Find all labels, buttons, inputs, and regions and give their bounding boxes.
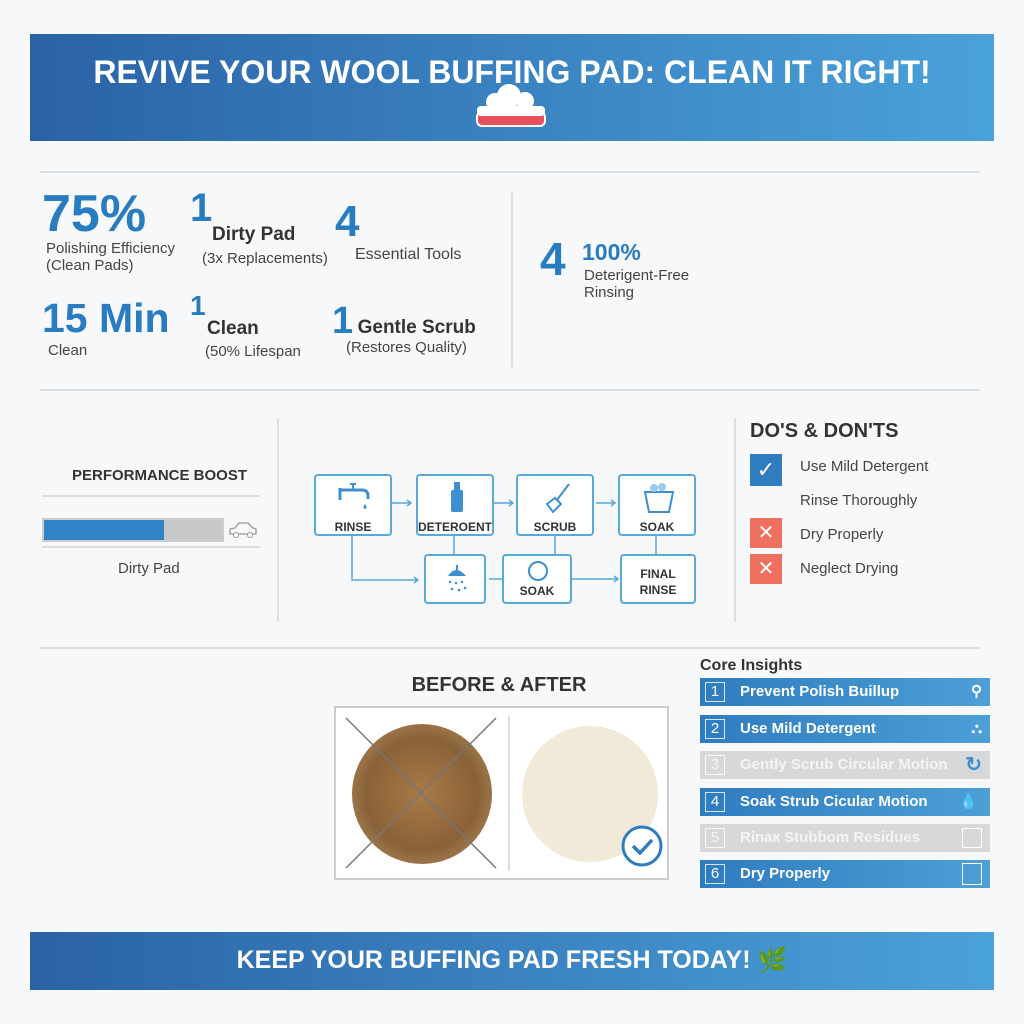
panel: performance boost: Dirty Pad — [118, 560, 180, 577]
insight 6 — [700, 860, 990, 888]
insight 2: Use Mild Detergent — [740, 720, 876, 737]
clean pad — [522, 726, 662, 866]
insight 3: Gently Scrub Circular Motion — [740, 756, 948, 773]
step scrub: SCRUB — [534, 520, 576, 534]
stat 100%: 100% — [582, 239, 641, 265]
stat 75%: 75% — [42, 185, 146, 243]
insight 3 — [700, 751, 990, 779]
panel: dos and donts: ✕ — [758, 558, 774, 580]
title: REVIVE YOUR WOOL BUFFING PAD: CLEAN IT RIGHT! — [93, 54, 931, 90]
stats panel: Dirty Pad — [212, 224, 295, 245]
stat 100%: Rinsing — [584, 284, 634, 301]
panel: dos and donts: Dry Properly — [800, 526, 883, 543]
insight 1: 1 — [711, 683, 719, 700]
step final rinse: RINSE — [640, 583, 676, 597]
before and after — [334, 674, 669, 880]
stat 1 gentle scrub: (Restores Quality) — [346, 339, 467, 356]
step rinse — [314, 474, 392, 536]
stat 4 tools — [335, 197, 461, 263]
step detergent: DETEROENT — [418, 520, 492, 534]
insight 5: Rinaк Stubbom Residues — [740, 829, 920, 846]
do item: ✓ — [757, 457, 775, 482]
stat 100%: Deterigent-Free — [584, 267, 689, 284]
step shower — [424, 554, 486, 604]
stat 1 gentle scrub: 1 Gentle Scrub — [332, 300, 476, 342]
insight 4: Soak Strub Cicular Motion — [740, 793, 928, 810]
step final rinse: FINAL — [640, 567, 676, 581]
step soak — [618, 474, 696, 536]
stat 75% — [42, 185, 175, 274]
stat 1 dirty pad — [190, 186, 328, 267]
stat 75%: Polishing Efficiency — [46, 240, 175, 257]
step soak 2 — [502, 554, 572, 604]
stat 1 clean — [190, 290, 301, 360]
insight 1: ⚲ — [971, 683, 982, 700]
stats panel: Clean — [207, 318, 259, 339]
step soak: SOAK — [640, 520, 674, 534]
panel: dos and donts: Rinse Thoroughly — [800, 492, 917, 509]
icon: sponge with suds — [476, 84, 546, 127]
insight 3: ↻ — [965, 754, 982, 776]
panel: dos and donts — [750, 420, 928, 584]
step final rinse — [620, 554, 696, 604]
insight 4: 💧 — [959, 793, 978, 810]
before and after: BEFORE & AFTER — [412, 674, 586, 696]
insight 2 — [700, 715, 990, 743]
stats panel: (50% Lifespan — [205, 343, 301, 360]
do item — [750, 454, 782, 486]
panel: performance boost: PERFORMANCE BOOST — [72, 467, 247, 484]
stat 75%: (Clean Pads) — [46, 257, 134, 274]
stats panel: (3x Replacements) — [202, 250, 328, 267]
step scrub — [516, 474, 594, 536]
dont item: ✕ — [758, 522, 774, 544]
insight 1 — [700, 678, 990, 706]
bar chart — [42, 518, 224, 542]
insight 6: Dry Properly — [740, 865, 830, 882]
panel: performance boost — [42, 467, 260, 577]
insight 4 — [700, 788, 990, 816]
core insights: Core Insights — [700, 657, 802, 674]
insight 5: 5 — [711, 829, 719, 846]
insight 2: ⛬ — [971, 720, 982, 737]
insight 3: 3 — [711, 756, 719, 773]
stat 100%: 4 — [540, 233, 566, 285]
insight 4: 4 — [711, 793, 719, 810]
step detergent — [416, 474, 494, 536]
insight 5 — [700, 824, 990, 852]
insight 1: Prevent Polish Buillup — [740, 683, 899, 700]
step soak 2: SOAK — [520, 584, 554, 598]
header banner — [30, 34, 994, 141]
stat 15 min: Clean — [48, 342, 87, 359]
stat 15 min: 15 Min — [42, 295, 170, 341]
panel: dos and donts: Neglect Drying — [800, 560, 898, 577]
insight 2: 2 — [711, 720, 719, 737]
stat 4 tools: Essential Tools — [355, 246, 461, 263]
panel: dos and donts: Use Mild Detergent — [800, 458, 928, 475]
panel: dos and donts: DO'S & DON'TS — [750, 420, 898, 442]
dont item — [750, 518, 782, 548]
insight 6: 6 — [711, 865, 719, 882]
footer banner — [30, 932, 994, 990]
stat 100% — [540, 233, 689, 301]
step rinse: RINSE — [335, 520, 371, 534]
flowchart — [314, 474, 696, 604]
icon: car — [229, 522, 257, 538]
stat 1 dirty pad: 1 — [190, 186, 212, 230]
stat 1 clean: 1 — [190, 290, 206, 321]
footer banner: KEEP YOUR BUFFING PAD FRESH TODAY! 🌿 — [237, 946, 787, 974]
stat 4 tools: 4 — [335, 197, 359, 246]
stats panel — [42, 185, 476, 360]
dirty pad — [346, 718, 496, 868]
